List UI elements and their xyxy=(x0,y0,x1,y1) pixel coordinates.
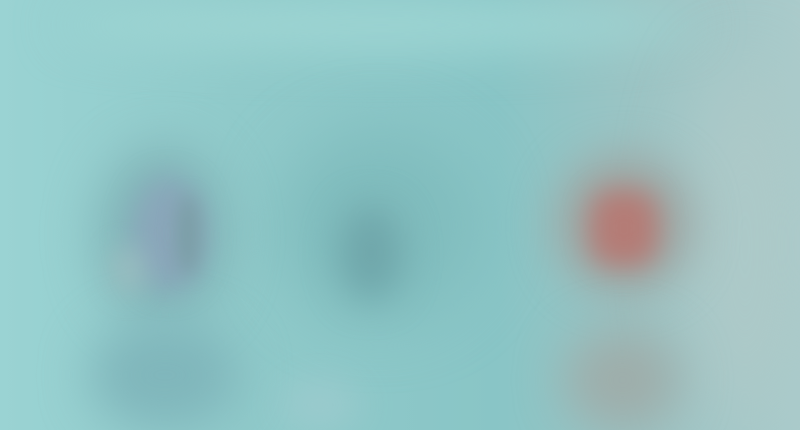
left figure blue core xyxy=(132,178,204,290)
central dark teal haze xyxy=(280,130,480,320)
top glow band xyxy=(60,0,700,50)
red figure core xyxy=(590,190,658,266)
left figure pale patch xyxy=(110,245,146,295)
left figure dark stripe xyxy=(176,195,200,275)
left figure haze xyxy=(95,145,230,325)
central base pale patch xyxy=(280,380,360,430)
right side grey haze xyxy=(690,60,800,430)
left figure lower shadow xyxy=(90,320,240,430)
red figure lower stem xyxy=(565,330,680,430)
central dark figure xyxy=(340,205,402,300)
red figure halo xyxy=(556,156,692,292)
